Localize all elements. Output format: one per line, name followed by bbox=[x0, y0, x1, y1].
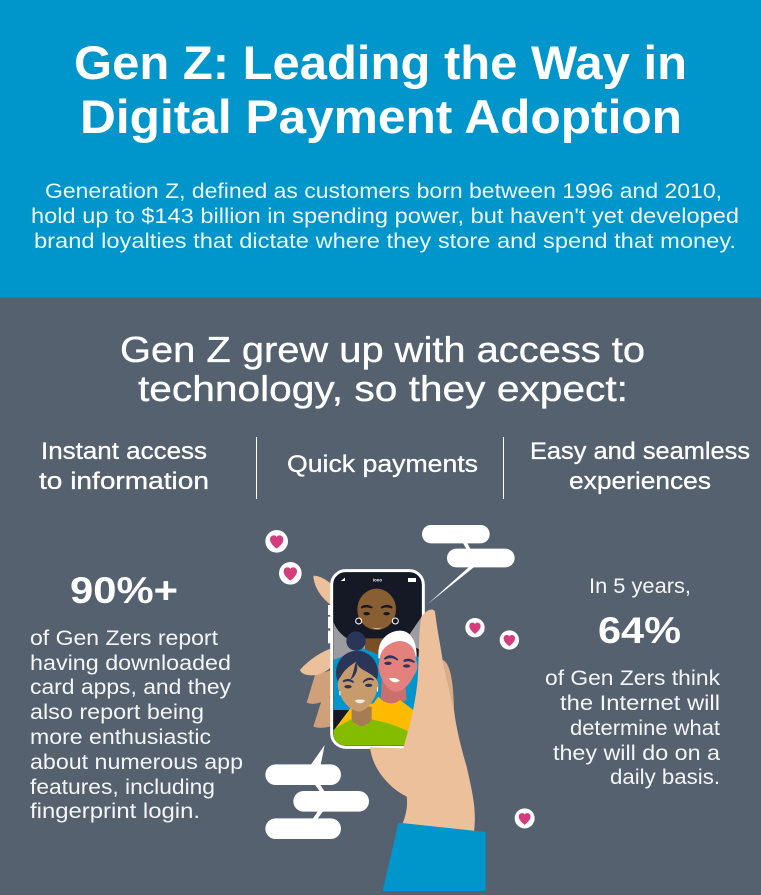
expectation: easy experiences: experiences bbox=[569, 468, 711, 495]
text block: internet: daily basis. bbox=[610, 766, 720, 789]
panel: gray body bbox=[30, 336, 750, 891]
blue backdrop bbox=[333, 648, 422, 710]
intro paragraph: Generation Z, defined as customers born between 1996 and 2010, bbox=[45, 179, 722, 203]
speech bubbles: top right bbox=[422, 525, 515, 604]
text block: internet bbox=[545, 667, 721, 789]
woman with bun bbox=[333, 631, 408, 747]
text block: card apps: card apps, and they bbox=[30, 676, 232, 699]
title: Gen Z: Leading the Way in bbox=[74, 36, 687, 89]
expectation: instant access: Instant access bbox=[41, 438, 207, 465]
text block: card apps: features, including bbox=[30, 776, 215, 799]
title bbox=[74, 36, 687, 143]
intro paragraph: hold up to $143 billion in spending power, but haven't yet developed bbox=[31, 204, 739, 228]
panel: blue header bbox=[0, 0, 761, 298]
expectation: instant access bbox=[39, 438, 209, 495]
icon: hand and thumb bbox=[370, 610, 475, 832]
text block: internet: the Internet will bbox=[560, 692, 720, 715]
icon: heart badge 4 bbox=[500, 630, 519, 650]
text block: internet: they will do on a bbox=[553, 742, 720, 765]
expectation: quick payments: Quick payments bbox=[287, 451, 478, 478]
stat: 90%+: 90%+ bbox=[70, 570, 178, 611]
icon: phone bbox=[328, 571, 423, 747]
stat: 64%: 64% bbox=[598, 610, 681, 651]
icon: heart badge 3 bbox=[465, 618, 485, 637]
status bar bbox=[341, 578, 416, 583]
intro paragraph bbox=[31, 179, 739, 253]
text block: card apps: more enthusiastic bbox=[30, 726, 211, 749]
text block: internet: of Gen Zers think bbox=[545, 667, 721, 690]
text block: card apps: having downloaded bbox=[30, 652, 231, 675]
expectation: instant access: to information bbox=[39, 468, 209, 495]
icon: back fingers bbox=[300, 576, 333, 728]
status bar: Iooo bbox=[373, 578, 382, 583]
text block: internet: determine what bbox=[570, 717, 720, 740]
icon: blue sleeve bbox=[383, 823, 486, 891]
text block: card apps: about numerous app bbox=[30, 751, 243, 774]
text block: card apps: also report being bbox=[30, 701, 204, 724]
icon: heart badge 1 bbox=[265, 530, 288, 553]
text block: card apps bbox=[30, 627, 243, 823]
text block: card apps: of Gen Zers report bbox=[30, 627, 218, 650]
illustration: hand holding phone bbox=[265, 525, 535, 891]
text block: card apps: fingerprint login. bbox=[30, 800, 200, 823]
speech bubbles: bottom left bbox=[265, 745, 369, 839]
expectation: easy experiences: Easy and seamless bbox=[530, 438, 750, 465]
section heading: technology, so they expect: bbox=[138, 368, 628, 409]
icon: heart badge 5 bbox=[515, 808, 535, 828]
section heading bbox=[120, 329, 645, 409]
man with white hair bbox=[334, 631, 417, 733]
expectation: easy experiences bbox=[530, 438, 750, 495]
icon: heart badge 2 bbox=[279, 562, 302, 585]
intro paragraph: brand loyalties that dictate where they store and spend that money. bbox=[34, 229, 736, 253]
woman with afro bbox=[356, 589, 398, 660]
section heading: Gen Z grew up with access to bbox=[120, 329, 645, 370]
text: in 5 years: In 5 years, bbox=[589, 575, 691, 598]
title: Digital Payment Adoption bbox=[80, 90, 682, 143]
